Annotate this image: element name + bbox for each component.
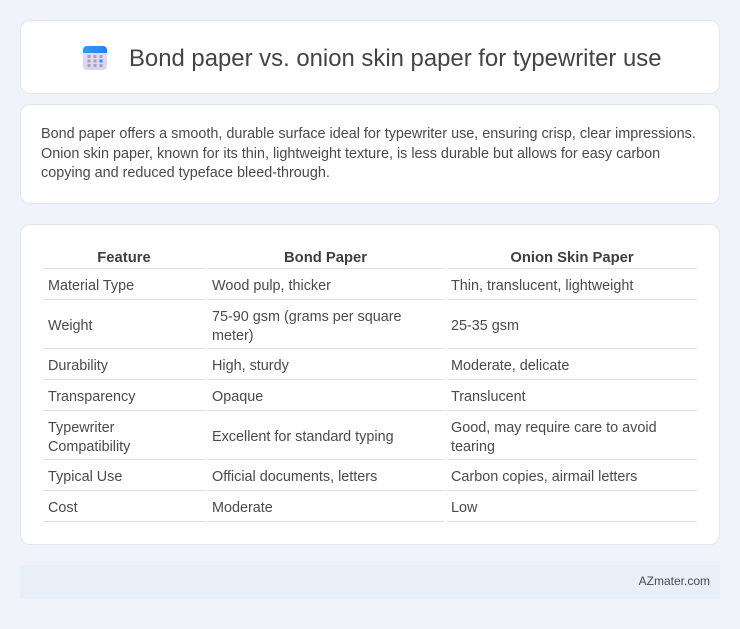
footer bar: [20, 565, 720, 599]
row: typical use: Official documents, letters: [212, 469, 377, 485]
header panel: [20, 20, 720, 94]
row: durability: Durability: [48, 358, 108, 374]
row: typewriter compatibility: Typewriter: [48, 420, 114, 436]
row: cost: Cost: [48, 500, 78, 516]
row: material type: Wood pulp, thicker: [212, 278, 331, 294]
row: transparency: Opaque: [212, 389, 263, 405]
row: transparency: [48, 389, 526, 405]
intro text panel: [20, 104, 720, 204]
row: typewriter compatibility: [48, 420, 657, 455]
row: cost: Moderate: [212, 500, 273, 516]
row: material type: Thin, translucent, lightweight: [451, 278, 633, 294]
row: weight: [48, 309, 519, 344]
row: transparency: Translucent: [451, 389, 526, 405]
intro paragraph: [41, 126, 696, 181]
row: weight: 75-90 gsm (grams per square: [212, 309, 402, 325]
intro paragraph: Onion skin paper, known for its thin, lightweight texture, is less durable but allows for easy carbon: [41, 146, 660, 162]
row: typical use: Typical Use: [48, 469, 122, 485]
footer credit: AZmater.com: [639, 574, 710, 588]
row: typewriter compatibility: Good, may require care to avoid: [451, 420, 657, 436]
row: weight: Weight: [48, 318, 93, 334]
row: cost: [48, 500, 478, 516]
row: material type: Material Type: [48, 278, 134, 294]
row: weight: meter): [212, 328, 254, 344]
row: cost: Low: [451, 500, 477, 516]
table header row: Feature: [97, 250, 151, 266]
row: typewriter compatibility: Excellent for standard typing: [212, 429, 394, 445]
title: Bond paper vs. onion skin paper for typewriter use: [129, 45, 662, 72]
row: transparency: Transparency: [48, 389, 135, 405]
intro paragraph: copying and reduced typeface bleed-through.: [41, 165, 330, 181]
row: typewriter compatibility: Compatibility: [48, 439, 130, 455]
row: typical use: [48, 469, 637, 485]
row: weight: 25-35 gsm: [451, 318, 519, 334]
intro paragraph: Bond paper offers a smooth, durable surface ideal for typewriter use, ensuring crisp, clear impressions.: [41, 126, 696, 142]
comparison table: [43, 250, 697, 522]
row: durability: [48, 358, 569, 374]
comparison table panel: [20, 224, 720, 545]
row: typical use: Carbon copies, airmail letters: [451, 469, 637, 485]
icon: calendar: [83, 46, 107, 70]
table header row: Onion Skin Paper: [510, 250, 634, 266]
row: durability: Moderate, delicate: [451, 358, 569, 374]
table header row: [97, 250, 634, 266]
row: material type: [48, 278, 634, 294]
row: durability: High, sturdy: [212, 358, 289, 374]
row: typewriter compatibility: tearing: [451, 439, 495, 455]
table header row: Bond Paper: [284, 250, 367, 266]
